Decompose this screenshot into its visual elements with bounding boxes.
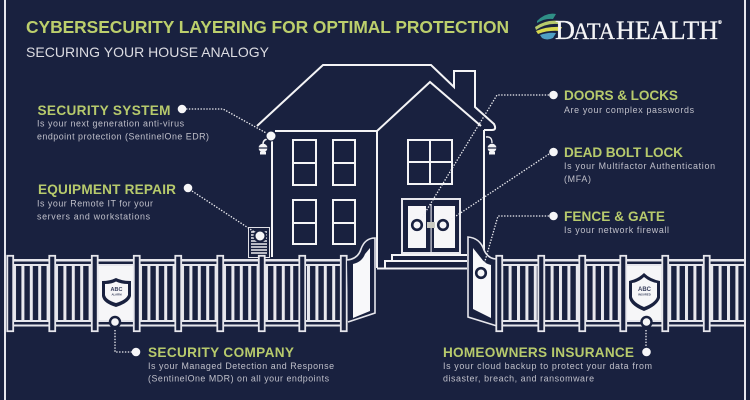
- callout: security company: [110, 317, 334, 384]
- callout: fence and gate: Is your network firewall: [564, 225, 669, 235]
- shield: ABC Alarm: ALARM: [111, 292, 122, 296]
- callout: fence and gate: [476, 209, 669, 278]
- callout: homeowners insurance: Is your cloud backup to protect your data from: [443, 361, 652, 371]
- rails: [7, 259, 347, 326]
- callout: equipment repair: Is your Remote IT for your: [37, 198, 153, 208]
- callout: equipment repair: EQUIPMENT REPAIR: [38, 182, 176, 197]
- callout: dead bolt lock: (MFA): [564, 174, 591, 184]
- pickets: [10, 265, 346, 321]
- callout: equipment repair: [37, 182, 266, 242]
- callout: security company: Is your Managed Detection and Response: [148, 361, 334, 371]
- wordmark: ATA: [573, 19, 615, 44]
- sign panel: [98, 265, 134, 321]
- shield: ABC Alarm: [102, 278, 131, 307]
- shield: ABC Insured: ABC: [638, 287, 652, 293]
- wordmark: HEALTH: [616, 16, 718, 45]
- shield: ABC Alarm: ABC: [111, 287, 122, 293]
- callout: dead bolt lock: DEAD BOLT LOCK: [564, 145, 683, 160]
- callout: homeowners insurance: HOMEOWNERS INSURANCE: [443, 345, 634, 360]
- callout: homeowners insurance: [443, 317, 652, 384]
- callout: security company: (SentinelOne MDR) on all your endpoints: [148, 374, 330, 384]
- house: [248, 65, 497, 268]
- callout: security system: endpoint protection (SentinelOne EDR): [37, 132, 209, 142]
- callout: doors and locks: [412, 88, 695, 230]
- shield: ABC Insured: [629, 273, 660, 311]
- callout: doors and locks: DOORS & LOCKS: [564, 88, 678, 103]
- roof outline with chimney: [257, 65, 495, 130]
- fence: left: [7, 256, 347, 331]
- equipment panel: [248, 228, 270, 258]
- posts: [496, 256, 710, 331]
- sign panel: [627, 265, 661, 321]
- front door: [402, 199, 460, 253]
- callout: homeowners insurance: disaster, breach, and ransomware: [443, 374, 594, 384]
- gate: left: [347, 238, 375, 322]
- camera: left: [258, 139, 269, 154]
- callout: fence and gate: FENCE & GATE: [564, 209, 665, 224]
- callout: security system: [37, 103, 276, 142]
- subtitle: SECURING YOUR HOUSE ANALOGY: [26, 44, 270, 60]
- left lower window 1: [293, 200, 316, 244]
- gate: right: [468, 237, 497, 326]
- callout: security company: SECURITY COMPANY: [148, 345, 294, 360]
- pickets: [503, 265, 744, 321]
- right window: [408, 140, 452, 184]
- left upper window 1: [293, 140, 316, 185]
- callout: equipment repair: servers and workstations: [37, 212, 151, 222]
- rails: [497, 259, 744, 326]
- callout: security system: Is your next generation anti-virus: [37, 118, 185, 128]
- icon: globe: [534, 14, 562, 40]
- callout: dead bolt lock: Is your Multifactor Authentication: [564, 161, 715, 171]
- wordmark: [555, 15, 722, 45]
- gable and main walls: [272, 82, 484, 268]
- front steps: [377, 255, 467, 268]
- callout: doors and locks: Are your complex passwords: [564, 105, 695, 115]
- logo: DataHealth: [534, 14, 722, 45]
- posts: [7, 256, 347, 331]
- wordmark: D: [555, 15, 575, 45]
- title: CYBERSECURITY LAYERING FOR OPTIMAL PROTECTION: [26, 17, 509, 37]
- left upper window 2: [333, 140, 355, 185]
- callout: security system: SECURITY SYSTEM: [38, 103, 170, 118]
- left lower window 2: [333, 200, 355, 244]
- wordmark: ®: [718, 20, 722, 26]
- shield: ABC Insured: INSURED: [638, 292, 651, 296]
- fence: right: [496, 256, 744, 331]
- callout: dead bolt lock: [438, 145, 715, 230]
- camera: right: [486, 137, 497, 154]
